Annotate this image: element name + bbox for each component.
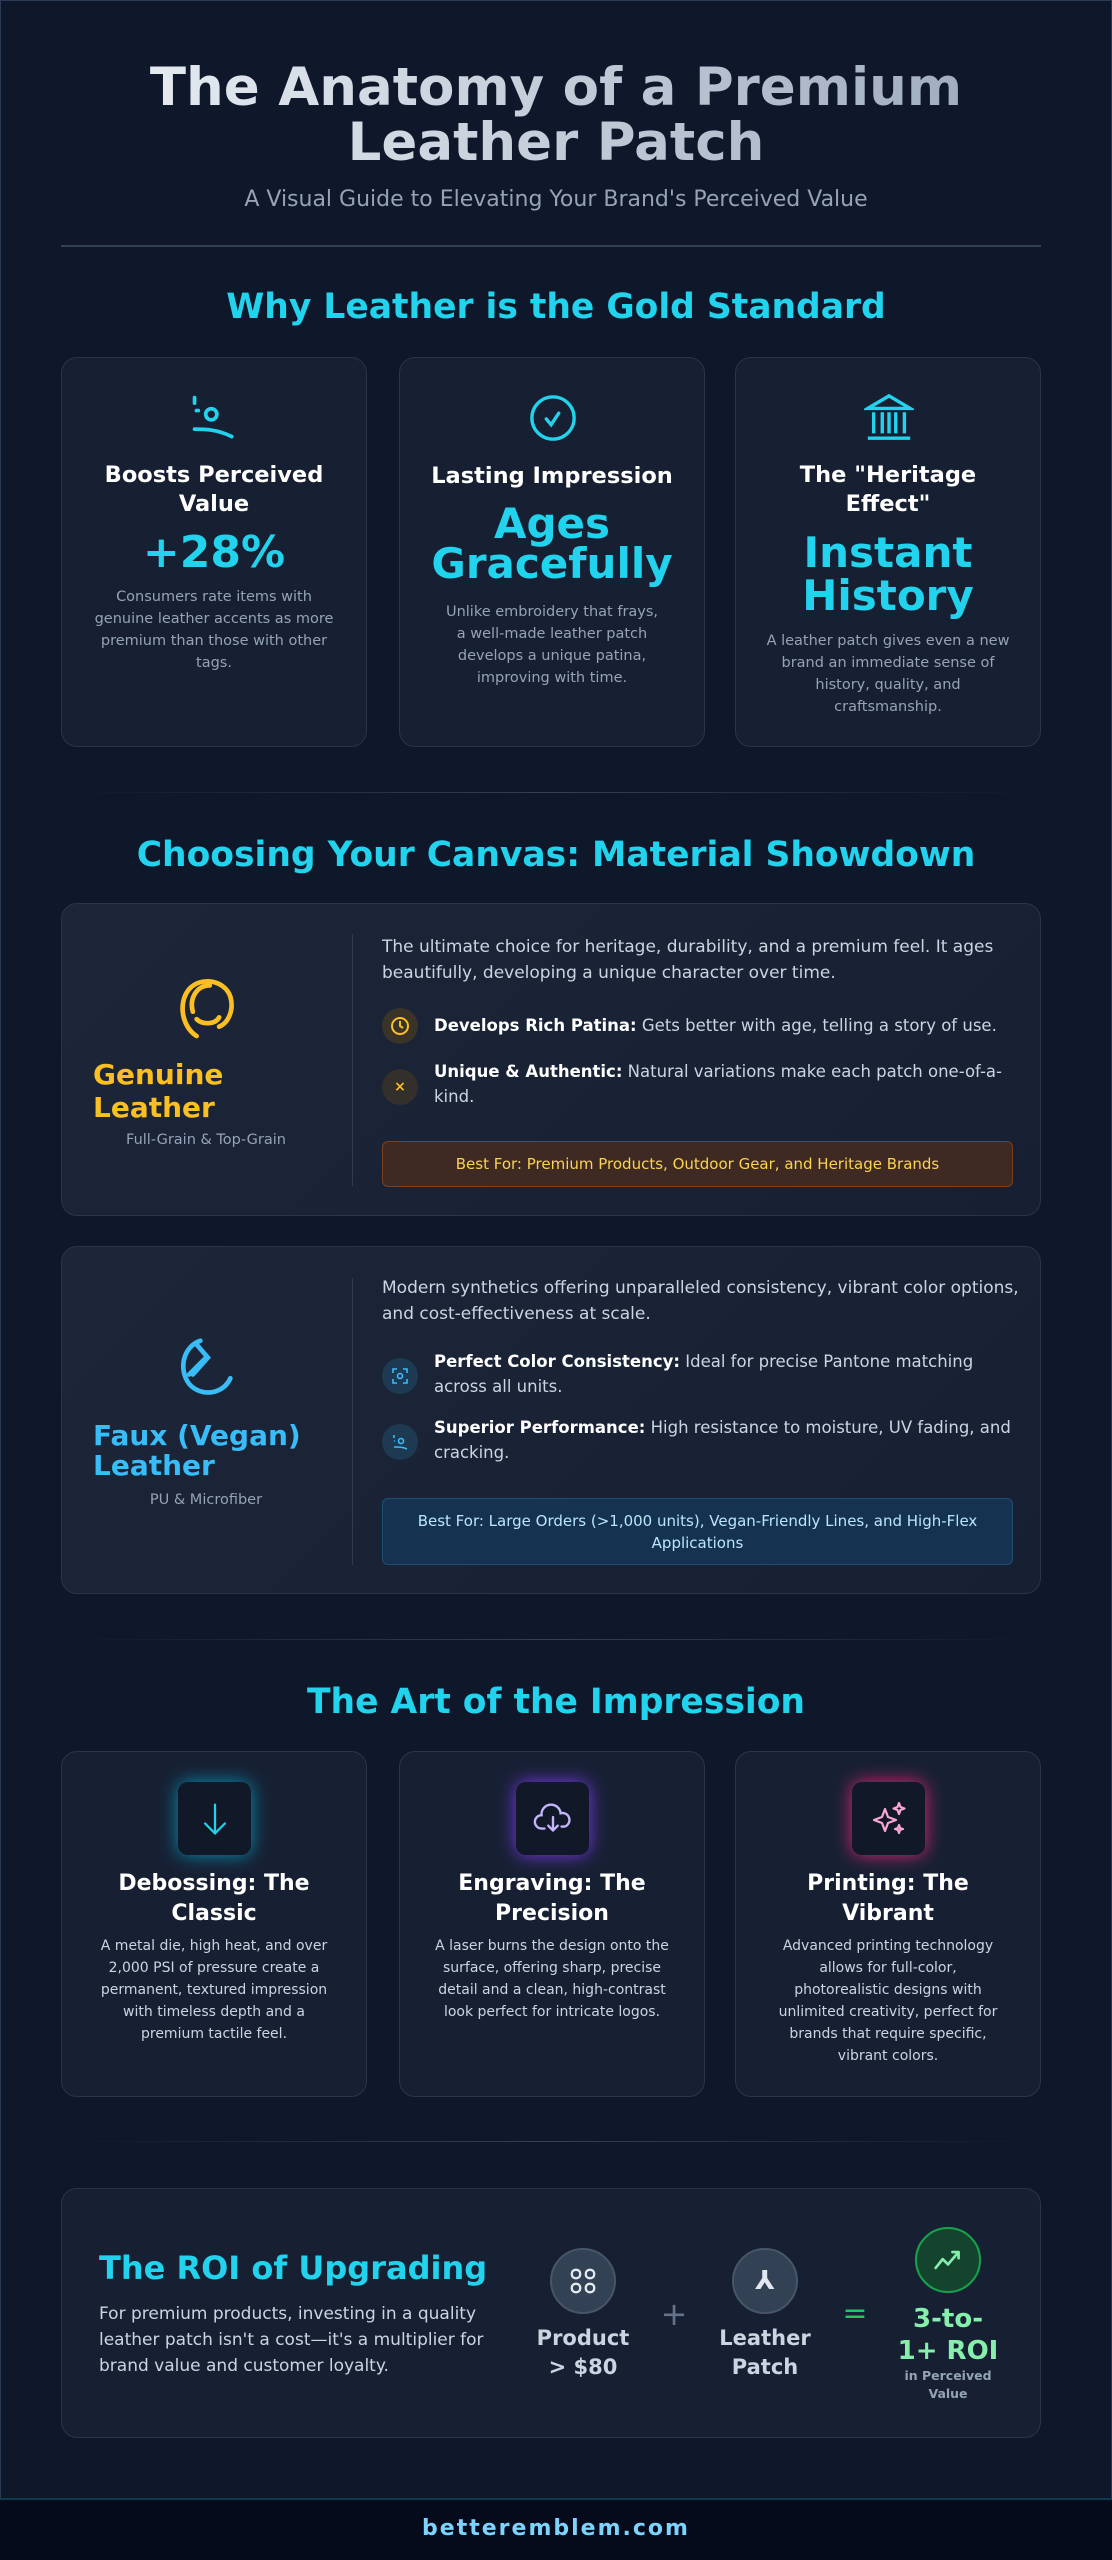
card: heritage: A leather patch gives even a new brand an immediate sense of history, quality, and craftsmanship. <box>767 633 1009 715</box>
plus sign: + <box>661 2295 687 2333</box>
card: printing: Advanced printing technology allows for full-color, photorealistic designs with unlimited creativity, perfect for brands that require specific, vibrant colors. <box>779 1938 997 2064</box>
label: faux leather: Faux (Vegan) <box>93 1419 301 1452</box>
bullet: patina <box>382 1008 997 1044</box>
icon: cloud download <box>516 1782 589 1855</box>
text: ROI description: For premium products, investing in a quality leather patch isn't a cost—it's a multiplier for brand value and customer loyalty. <box>99 2304 484 2376</box>
footer: betteremblem.com <box>422 2516 690 2541</box>
panel: ROI <box>61 2188 1041 2438</box>
heading: art of impression: The Art of the Impression <box>307 1682 805 1722</box>
equation: product: Product <box>537 2326 629 2350</box>
title: Leather Patch <box>348 112 764 173</box>
equation: ROI result <box>898 2227 998 2401</box>
card: heritage <box>735 357 1041 747</box>
card: lasting impression: Gracefully <box>431 539 673 588</box>
card: perceived value: Value <box>179 491 249 517</box>
card: engraving: Engraving: The <box>458 1871 646 1896</box>
icon: building <box>864 394 914 440</box>
card: perceived value: +28% <box>143 527 285 578</box>
icon: sparkles <box>852 1782 925 1855</box>
card: heritage: History <box>802 571 974 620</box>
card: perceived value: Consumers rate items with genuine leather accents as more premium than those with other tags. <box>95 589 333 671</box>
label: genuine leather: Leather <box>93 1091 215 1124</box>
equation: ROI result: 1+ ROI <box>898 2336 998 2366</box>
icon: leather <box>180 979 234 1038</box>
panel: faux leather: PU & Microfiber <box>150 1492 262 1508</box>
equation: leather patch <box>719 2248 811 2379</box>
title <box>0 60 1112 170</box>
heading: material showdown: Choosing Your Canvas: Material Showdown <box>137 835 975 875</box>
panel: faux leather <box>61 1246 1041 1594</box>
card: engraving: A laser burns the design onto the surface, offering sharp, precise detail and a clean, high-contrast look perfect for intricate logos. <box>435 1938 669 2020</box>
bullet: unique: Unique & Authentic: Natural variations make each patch one-of-a-kind. <box>434 1062 1002 1106</box>
card: heritage: Instant <box>804 528 972 577</box>
footer <box>0 2498 1112 2560</box>
label: genuine leather <box>93 1058 223 1124</box>
card: printing: Vibrant <box>842 1901 934 1926</box>
card: printing: Printing: The <box>807 1871 969 1896</box>
equals sign: = <box>842 2296 868 2331</box>
card: debossing: A metal die, high heat, and over 2,000 PSI of pressure create a permanent, textured impression with timeless depth and a premium tactile feel. <box>101 1938 327 2042</box>
label: faux leather <box>93 1419 301 1482</box>
panel: genuine leather: × <box>394 1078 406 1094</box>
card: heritage: The "Heritage <box>800 462 976 488</box>
title: The Anatomy of a Premium <box>150 57 962 118</box>
equation: ROI result: in Perceived <box>904 2368 992 2383</box>
card: engraving <box>399 1751 705 2097</box>
equation: product <box>537 2248 629 2379</box>
best for: genuine <box>382 1141 1013 1187</box>
card: perceived value: Boosts Perceived <box>105 462 323 488</box>
icon: faux <box>180 1338 233 1395</box>
icon: value <box>192 396 234 438</box>
equation: leather patch: Leather <box>719 2326 811 2350</box>
best for: faux <box>382 1498 1013 1565</box>
heading: ROI: The ROI of Upgrading <box>99 2249 487 2287</box>
card: debossing: Debossing: The <box>118 1871 310 1896</box>
card: heritage: Effect" <box>846 491 930 517</box>
label: faux leather: Leather <box>93 1449 215 1482</box>
card: lasting impression: Unlike embroidery that frays, a well-made leather patch develops a unique patina, improving with time. <box>446 604 658 686</box>
bullet: color: Perfect Color Consistency: Ideal for precise Pantone matching across all units. <box>434 1352 973 1396</box>
card: printing <box>735 1751 1041 2097</box>
bullet: performance: Superior Performance: High resistance to moisture, UV fading, and cracking. <box>434 1418 1011 1462</box>
card: perceived value <box>61 357 367 747</box>
panel: genuine leather <box>61 903 1041 1216</box>
card: lasting impression: Ages <box>494 499 610 548</box>
card: lasting impression: Lasting Impression <box>431 463 673 489</box>
icon: check <box>530 395 576 441</box>
equation: product: > $80 <box>549 2355 617 2379</box>
equation: leather patch: Patch <box>732 2355 798 2379</box>
panel: genuine leather: Full-Grain & Top-Grain <box>126 1132 286 1148</box>
equation: ROI result: Value <box>928 2386 968 2401</box>
icon: down arrow <box>178 1782 251 1855</box>
card: engraving: Precision <box>495 1901 609 1926</box>
bullet: patina: Develops Rich Patina: Gets better with age, telling a story of use. <box>434 1016 997 1035</box>
card: lasting impression <box>399 357 705 747</box>
heading: why leather: Why Leather is the Gold Standard <box>226 287 886 327</box>
best for: faux: Best For: Large Orders (>1,000 units), Vegan-Friendly Lines, and High-Flex Applications <box>418 1512 977 1552</box>
text: description: Modern synthetics offering unparalleled consistency, vibrant color options, and cost-effectiveness at scale. <box>382 1278 1019 1324</box>
best for: genuine: Best For: Premium Products, Outdoor Gear, and Heritage Brands <box>456 1155 939 1173</box>
card: debossing <box>61 1751 367 2097</box>
equation: leather patch: ⅄ <box>755 2266 775 2296</box>
card: debossing: Classic <box>171 1901 257 1926</box>
equation: ROI result: 3-to- <box>913 2304 983 2334</box>
text: description: The ultimate choice for heritage, durability, and a premium feel. It ages beautifully, developing a unique character over time. <box>382 937 993 983</box>
subtitle: A Visual Guide to Elevating Your Brand's Perceived Value <box>244 187 868 212</box>
label: genuine leather: Genuine <box>93 1058 223 1091</box>
